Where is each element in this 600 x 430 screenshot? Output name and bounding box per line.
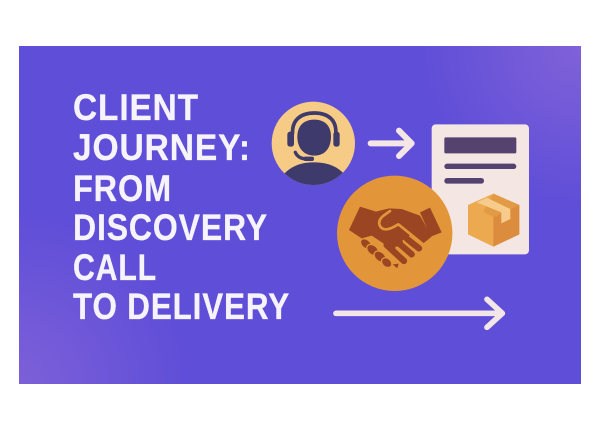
title: JOURNEY: (73, 126, 251, 168)
arrow: small (371, 131, 412, 156)
title: FROM (73, 167, 172, 209)
background panel (19, 46, 581, 384)
arrow: long (336, 299, 502, 327)
document text line (444, 164, 516, 169)
document card (432, 124, 529, 254)
document title bar (444, 137, 516, 153)
icon: handshake in orange circle (337, 176, 452, 291)
title: CLIENT (73, 86, 199, 128)
document short text line (444, 178, 484, 184)
icon: customer support agent with headset (272, 102, 355, 187)
title: CALL (73, 246, 157, 288)
orange circle (337, 176, 452, 291)
title: TO DELIVERY (73, 285, 290, 327)
handshake (349, 207, 442, 270)
icon: package box (468, 194, 519, 247)
title: DISCOVERY (73, 206, 268, 248)
title (73, 86, 290, 327)
